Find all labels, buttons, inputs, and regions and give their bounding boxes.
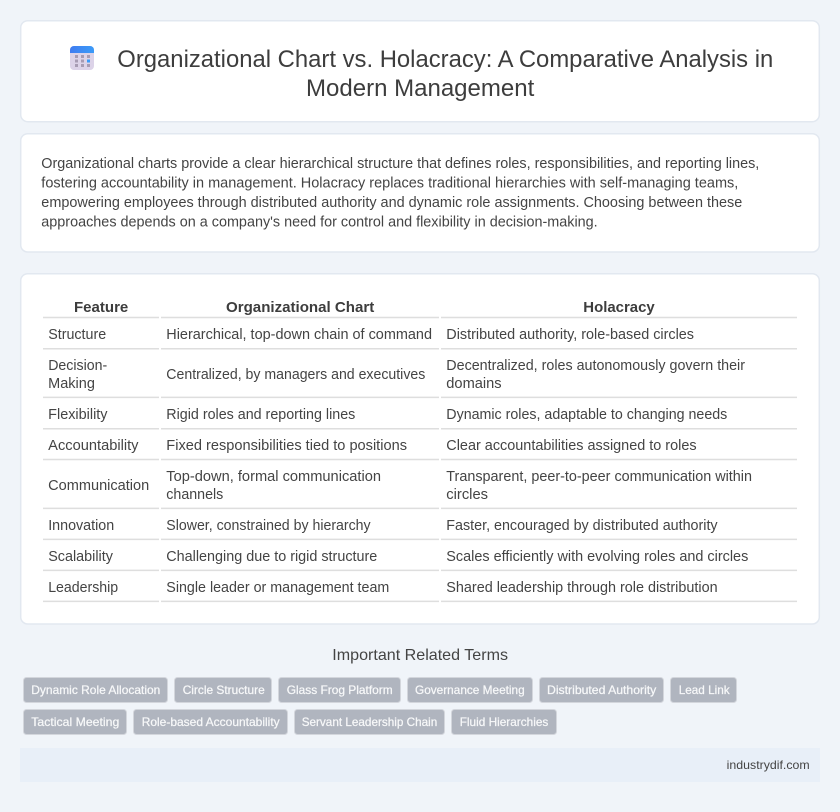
row: accountability: Accountability [48,438,139,454]
table header row: Feature [74,299,128,316]
row: leadership [48,580,718,596]
panel: comparison table [21,274,819,624]
icon: calendar grid [70,46,94,70]
row: structure: Hierarchical, top-down chain of command [166,327,432,343]
title: Modern Management [306,75,534,102]
row: flexibility: Flexibility [48,407,108,423]
row: flexibility [48,407,727,423]
tag: distributed authority [540,678,664,702]
text block: introduction paragraph: Organizational charts provide a clear hierarchical structure that defines roles, responsibilities, and reporting lines, [41,156,759,172]
tag: tactical meeting [24,710,126,734]
table header row: Organizational Chart [226,299,374,316]
tag: dynamic role allocation [24,678,168,702]
row: accountability [48,438,697,454]
row: decision-making: Decentralized, roles autonomously govern their [446,358,745,374]
row: decision-making: Making [48,376,95,392]
tag: fluid hierarchies: Fluid Hierarchies [460,715,548,729]
row: flexibility: Dynamic roles, adaptable to changing needs [446,407,727,423]
row: innovation: Faster, encouraged by distributed authority [446,518,718,534]
row: communication: Transparent, peer-to-peer communication within [446,469,752,485]
title [117,46,773,102]
row: scalability: Scalability [48,549,114,565]
row: flexibility: Rigid roles and reporting lines [166,407,355,423]
text block: introduction paragraph: fostering accountability in management. Holacracy replaces traditional hierarchies with self-managing teams, [41,176,738,192]
row: decision-making: Centralized, by managers and executives [166,367,425,383]
table header row: Holacracy [583,299,655,316]
row: scalability: Scales efficiently with evolving roles and circles [446,549,748,565]
row: leadership: Shared leadership through role distribution [446,580,718,596]
footer: industrydif.com [727,758,810,772]
tag: governance meeting [408,678,532,702]
tag: lead link: Lead Link [679,683,731,697]
tag: governance meeting: Governance Meeting [415,683,525,697]
text block: introduction paragraph: approaches depends on a company's need for control and flexibility in decision-making. [41,214,598,230]
tag: circle structure: Circle Structure [183,683,265,697]
row: decision-making [48,358,745,392]
row: structure: Distributed authority, role-based circles [446,327,694,343]
tag: glass frog platform: Glass Frog Platform [287,683,393,697]
tag: fluid hierarchies [452,710,556,734]
row: communication: Top-down, formal communication [166,469,381,485]
row: accountability: Clear accountabilities assigned to roles [446,438,697,454]
tag: tactical meeting: Tactical Meeting [31,715,119,729]
tag: servant leadership chain: Servant Leadership Chain [302,715,437,729]
row: communication: channels [166,487,223,503]
panel: related term tags [24,678,736,734]
tag: glass frog platform [278,678,400,702]
row: communication: circles [446,487,488,503]
row: scalability: Challenging due to rigid structure [166,549,377,565]
title: Organizational Chart vs. Holacracy: A Comparative Analysis in [117,46,773,73]
row: accountability: Fixed responsibilities tied to positions [166,438,407,454]
tag: lead link [670,678,736,702]
footer [20,748,820,782]
tag: circle structure [174,678,272,702]
tag: role-based accountability [134,710,288,734]
row: structure: Structure [48,327,106,343]
row: innovation: Slower, constrained by hierarchy [166,518,371,534]
heading: important related terms: Important Related Terms [332,647,508,664]
row: communication: Communication [48,478,149,494]
panel: introduction [21,134,819,252]
row: decision-making: domains [446,376,502,392]
tag: distributed authority: Distributed Authority [547,683,656,697]
row: leadership: Single leader or management team [166,580,389,596]
table header row [74,299,655,316]
panel: header [21,21,819,122]
row: innovation [48,518,718,534]
tag: servant leadership chain [294,710,444,734]
row: structure [48,327,694,343]
row: communication [48,469,752,503]
row: scalability [48,549,748,565]
row: leadership: Leadership [48,580,118,596]
tag: role-based accountability: Role-based Accountability [142,715,280,729]
text block: introduction paragraph [41,156,759,230]
tag: dynamic role allocation: Dynamic Role Allocation [31,683,160,697]
text block: introduction paragraph: empowering employees through distributed authority and dynamic role assignments. Choosing between these [41,195,742,211]
row: decision-making: Decision- [48,358,107,374]
row: innovation: Innovation [48,518,114,534]
